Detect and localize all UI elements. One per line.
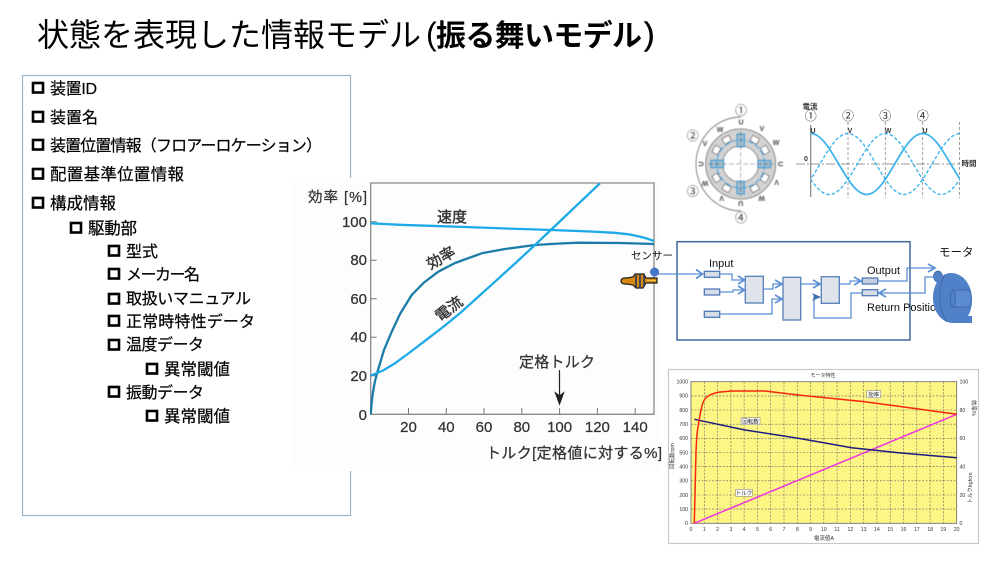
position numbers: ④ bbox=[735, 211, 747, 225]
position numbers: ③ bbox=[687, 184, 699, 198]
phase letters: W bbox=[701, 179, 708, 186]
title bbox=[37, 16, 655, 53]
x axis title: トルク[定格値に対する%] bbox=[486, 445, 662, 462]
chart frame bbox=[668, 370, 978, 544]
curve: torque bbox=[694, 414, 957, 523]
label: トルク: トルク bbox=[736, 490, 752, 497]
axis titles: 回転数rpm bbox=[668, 443, 676, 469]
left axis numbers bbox=[676, 380, 688, 527]
grid bbox=[691, 396, 957, 509]
left axis numbers: 0 bbox=[685, 521, 688, 527]
wave labels: ② bbox=[842, 109, 854, 123]
wave labels: W bbox=[885, 128, 892, 135]
label: output: Output bbox=[867, 265, 900, 277]
curve: current bbox=[371, 183, 600, 376]
phase letters: W bbox=[758, 194, 765, 201]
left axis numbers: 400 bbox=[679, 464, 688, 470]
y axis labels: 40 bbox=[350, 329, 367, 346]
axis titles: トルクkgfcm bbox=[967, 472, 974, 504]
bottom axis numbers: 4 bbox=[743, 527, 746, 533]
item: 型式: 型式 bbox=[126, 243, 158, 261]
curve: efficiency bbox=[371, 243, 654, 414]
phase letters bbox=[699, 120, 783, 206]
chart title: モータ特性 bbox=[810, 372, 836, 379]
panel: device information list bbox=[22, 76, 350, 516]
bottom axis numbers: 19 bbox=[940, 527, 946, 533]
axes bbox=[810, 125, 812, 197]
bottom axis numbers: 3 bbox=[729, 527, 732, 533]
bottom axis numbers: 2 bbox=[716, 527, 719, 533]
bottom axis numbers: 9 bbox=[809, 527, 812, 533]
bottom axis numbers: 8 bbox=[796, 527, 799, 533]
label: rated torque: 定格トルク bbox=[519, 354, 595, 371]
item: 温度データ: 温度データ bbox=[126, 335, 204, 354]
phase letters: U bbox=[699, 161, 706, 167]
curve: rotation speed bbox=[694, 419, 957, 458]
axis titles bbox=[668, 400, 978, 542]
wave labels: 0 bbox=[804, 156, 808, 163]
item: 型式 bbox=[109, 243, 158, 261]
position numbers: ② bbox=[687, 129, 699, 143]
item: 装置位置情報: 装置位置情報（フロアーロケーション） bbox=[50, 137, 322, 155]
x axis labels: 80 bbox=[513, 419, 530, 436]
position numbers: ① bbox=[735, 104, 747, 118]
title: ( bbox=[426, 16, 437, 52]
left axis numbers: 800 bbox=[679, 408, 688, 414]
phase letters: W bbox=[773, 140, 780, 147]
bottom axis numbers: 13 bbox=[861, 527, 867, 533]
y axis labels: 80 bbox=[350, 252, 367, 269]
plot background bbox=[691, 382, 957, 523]
label: 回転数: 回転数 bbox=[742, 418, 759, 426]
y axis labels: 100 bbox=[342, 214, 367, 231]
label: 回転数 bbox=[741, 418, 760, 426]
phase letters: V bbox=[774, 178, 779, 185]
chart: three-phase current waveforms bbox=[796, 102, 976, 198]
curve: speed bbox=[371, 223, 654, 241]
right axis numbers: 80 bbox=[960, 408, 965, 414]
x axis labels: 120 bbox=[585, 419, 610, 436]
label: input: Input bbox=[709, 258, 733, 270]
outer arc bbox=[696, 117, 741, 211]
item: 装置名: 装置名 bbox=[50, 109, 98, 127]
bottom axis numbers: 7 bbox=[783, 527, 786, 533]
phase letters: W bbox=[717, 127, 724, 134]
controller frame bbox=[677, 242, 910, 340]
left axis numbers: 100 bbox=[679, 507, 688, 513]
phase letters: V bbox=[719, 194, 724, 201]
bottom axis numbers: 11 bbox=[834, 527, 840, 533]
left axis numbers: 700 bbox=[679, 422, 688, 428]
wave U bbox=[811, 134, 979, 194]
y axis labels: 0 bbox=[359, 407, 367, 424]
left axis numbers: 900 bbox=[679, 394, 688, 400]
x axis labels: 20 bbox=[400, 419, 417, 436]
item: メーカー名: メーカー名 bbox=[126, 266, 200, 284]
label: 効率: 効率 bbox=[868, 390, 880, 398]
right axis numbers: 60 bbox=[960, 436, 965, 442]
item: 温度 異常閾値: 異常閾値 bbox=[164, 360, 230, 379]
item: 振動 異常閾値: 異常閾値 bbox=[164, 407, 230, 426]
icon: motor bbox=[933, 271, 972, 323]
chart: motor efficiency vs torque bbox=[293, 178, 662, 471]
phase letters: U bbox=[776, 161, 783, 167]
left axis numbers: 500 bbox=[679, 450, 688, 456]
right axis numbers: 100 bbox=[960, 380, 968, 386]
x axis labels: 140 bbox=[623, 419, 648, 436]
winding ring bbox=[717, 140, 765, 188]
right axis numbers: 40 bbox=[960, 464, 965, 470]
bottom axis numbers: 17 bbox=[914, 527, 920, 533]
item: 装置ID bbox=[33, 80, 97, 98]
connector lines bbox=[655, 268, 936, 318]
label: return position: Return Position bbox=[867, 302, 942, 314]
left axis numbers: 200 bbox=[679, 493, 688, 499]
wave labels: ③ bbox=[879, 109, 891, 123]
phase letters: U bbox=[738, 120, 744, 126]
bottom axis numbers: 20 bbox=[954, 527, 960, 533]
label: sensor: センサー bbox=[631, 250, 673, 262]
guide lines bbox=[848, 122, 960, 198]
left axis numbers: 600 bbox=[679, 436, 688, 442]
arrow: rated torque bbox=[556, 370, 564, 404]
label: efficiency: 効率 bbox=[424, 244, 458, 273]
item: 装置名 bbox=[33, 109, 98, 127]
label: speed: 速度 bbox=[437, 209, 467, 226]
phase letters: V bbox=[703, 141, 708, 148]
title: ) bbox=[644, 16, 655, 52]
chart: motor characteristics bbox=[668, 370, 978, 544]
bottom axis numbers: 6 bbox=[769, 527, 772, 533]
item: 正常時特性データ: 正常時特性データ bbox=[126, 312, 255, 331]
wave labels: ④ bbox=[917, 109, 929, 123]
wave labels: 時間 bbox=[962, 158, 976, 168]
right axis numbers: 0 bbox=[960, 521, 962, 527]
item: 装置ID: 装置ID bbox=[50, 80, 97, 98]
position numbers bbox=[687, 104, 747, 225]
bottom axis numbers: 18 bbox=[927, 527, 933, 533]
label: motor: モータ bbox=[939, 246, 974, 259]
y axis labels: 20 bbox=[350, 368, 367, 385]
axis titles: 効率% bbox=[970, 400, 978, 416]
y axis labels bbox=[342, 214, 367, 424]
icon: temperature sensor bbox=[621, 268, 659, 288]
x axis labels: 40 bbox=[438, 419, 455, 436]
item: 構成情報: 構成情報 bbox=[50, 194, 116, 213]
x axis labels bbox=[400, 419, 648, 436]
right axis numbers bbox=[960, 380, 968, 527]
y axis labels: 60 bbox=[350, 291, 367, 308]
bottom axis numbers: 5 bbox=[756, 527, 759, 533]
wave labels: U bbox=[810, 128, 816, 135]
bottom axis numbers: 10 bbox=[821, 527, 827, 533]
curve: efficiency bbox=[694, 391, 957, 523]
bottom axis numbers: 14 bbox=[874, 527, 880, 533]
wave labels: 電流 bbox=[802, 101, 818, 111]
left axis numbers: 300 bbox=[679, 479, 688, 485]
coils bbox=[712, 135, 769, 193]
stator ring bbox=[714, 138, 767, 190]
title: 状態を表現した情報モデル bbox=[37, 17, 421, 53]
axis titles: 電流値A bbox=[814, 534, 834, 542]
processing blocks bbox=[745, 276, 839, 320]
right axis numbers: 20 bbox=[960, 493, 965, 499]
axes bbox=[371, 183, 654, 414]
wave labels: V bbox=[848, 128, 853, 135]
bottom axis numbers bbox=[690, 527, 960, 533]
input and output slots bbox=[704, 271, 878, 317]
wave labels: ① bbox=[805, 109, 817, 123]
diagram: stator winding bbox=[687, 104, 783, 225]
block diagram: controller bbox=[631, 242, 974, 340]
filled arrow head bbox=[812, 293, 821, 301]
item: 振動データ: 振動データ bbox=[126, 383, 204, 402]
center lines bbox=[708, 131, 774, 197]
y axis title: 効率 [%] bbox=[308, 189, 367, 206]
item: 配置基準位置情報: 配置基準位置情報 bbox=[50, 165, 184, 184]
bottom axis numbers: 1 bbox=[703, 527, 706, 533]
bottom axis numbers: 12 bbox=[848, 527, 853, 533]
phase letters: V bbox=[760, 126, 765, 133]
phase letters: U bbox=[738, 199, 743, 206]
title: 振る舞いモデル bbox=[436, 19, 642, 53]
wave labels: U bbox=[922, 128, 928, 135]
bottom axis numbers: 0 bbox=[690, 527, 693, 533]
label: current: 電流 bbox=[432, 293, 466, 325]
bottom axis numbers: 16 bbox=[901, 527, 906, 533]
wave V bbox=[792, 134, 960, 194]
wave W bbox=[810, 132, 960, 196]
left axis numbers: 1000 bbox=[676, 380, 688, 386]
active coils bbox=[711, 134, 771, 194]
bottom axis numbers: 15 bbox=[887, 527, 893, 533]
label: 効率 bbox=[867, 390, 881, 398]
item: 駆動部: 駆動部 bbox=[88, 219, 137, 238]
wave labels bbox=[802, 101, 976, 168]
arrow heads bbox=[696, 264, 935, 303]
x axis labels: 60 bbox=[476, 419, 492, 436]
x axis labels: 100 bbox=[547, 419, 572, 436]
item: 取扱いマニュアル: 取扱いマニュアル bbox=[126, 290, 251, 308]
